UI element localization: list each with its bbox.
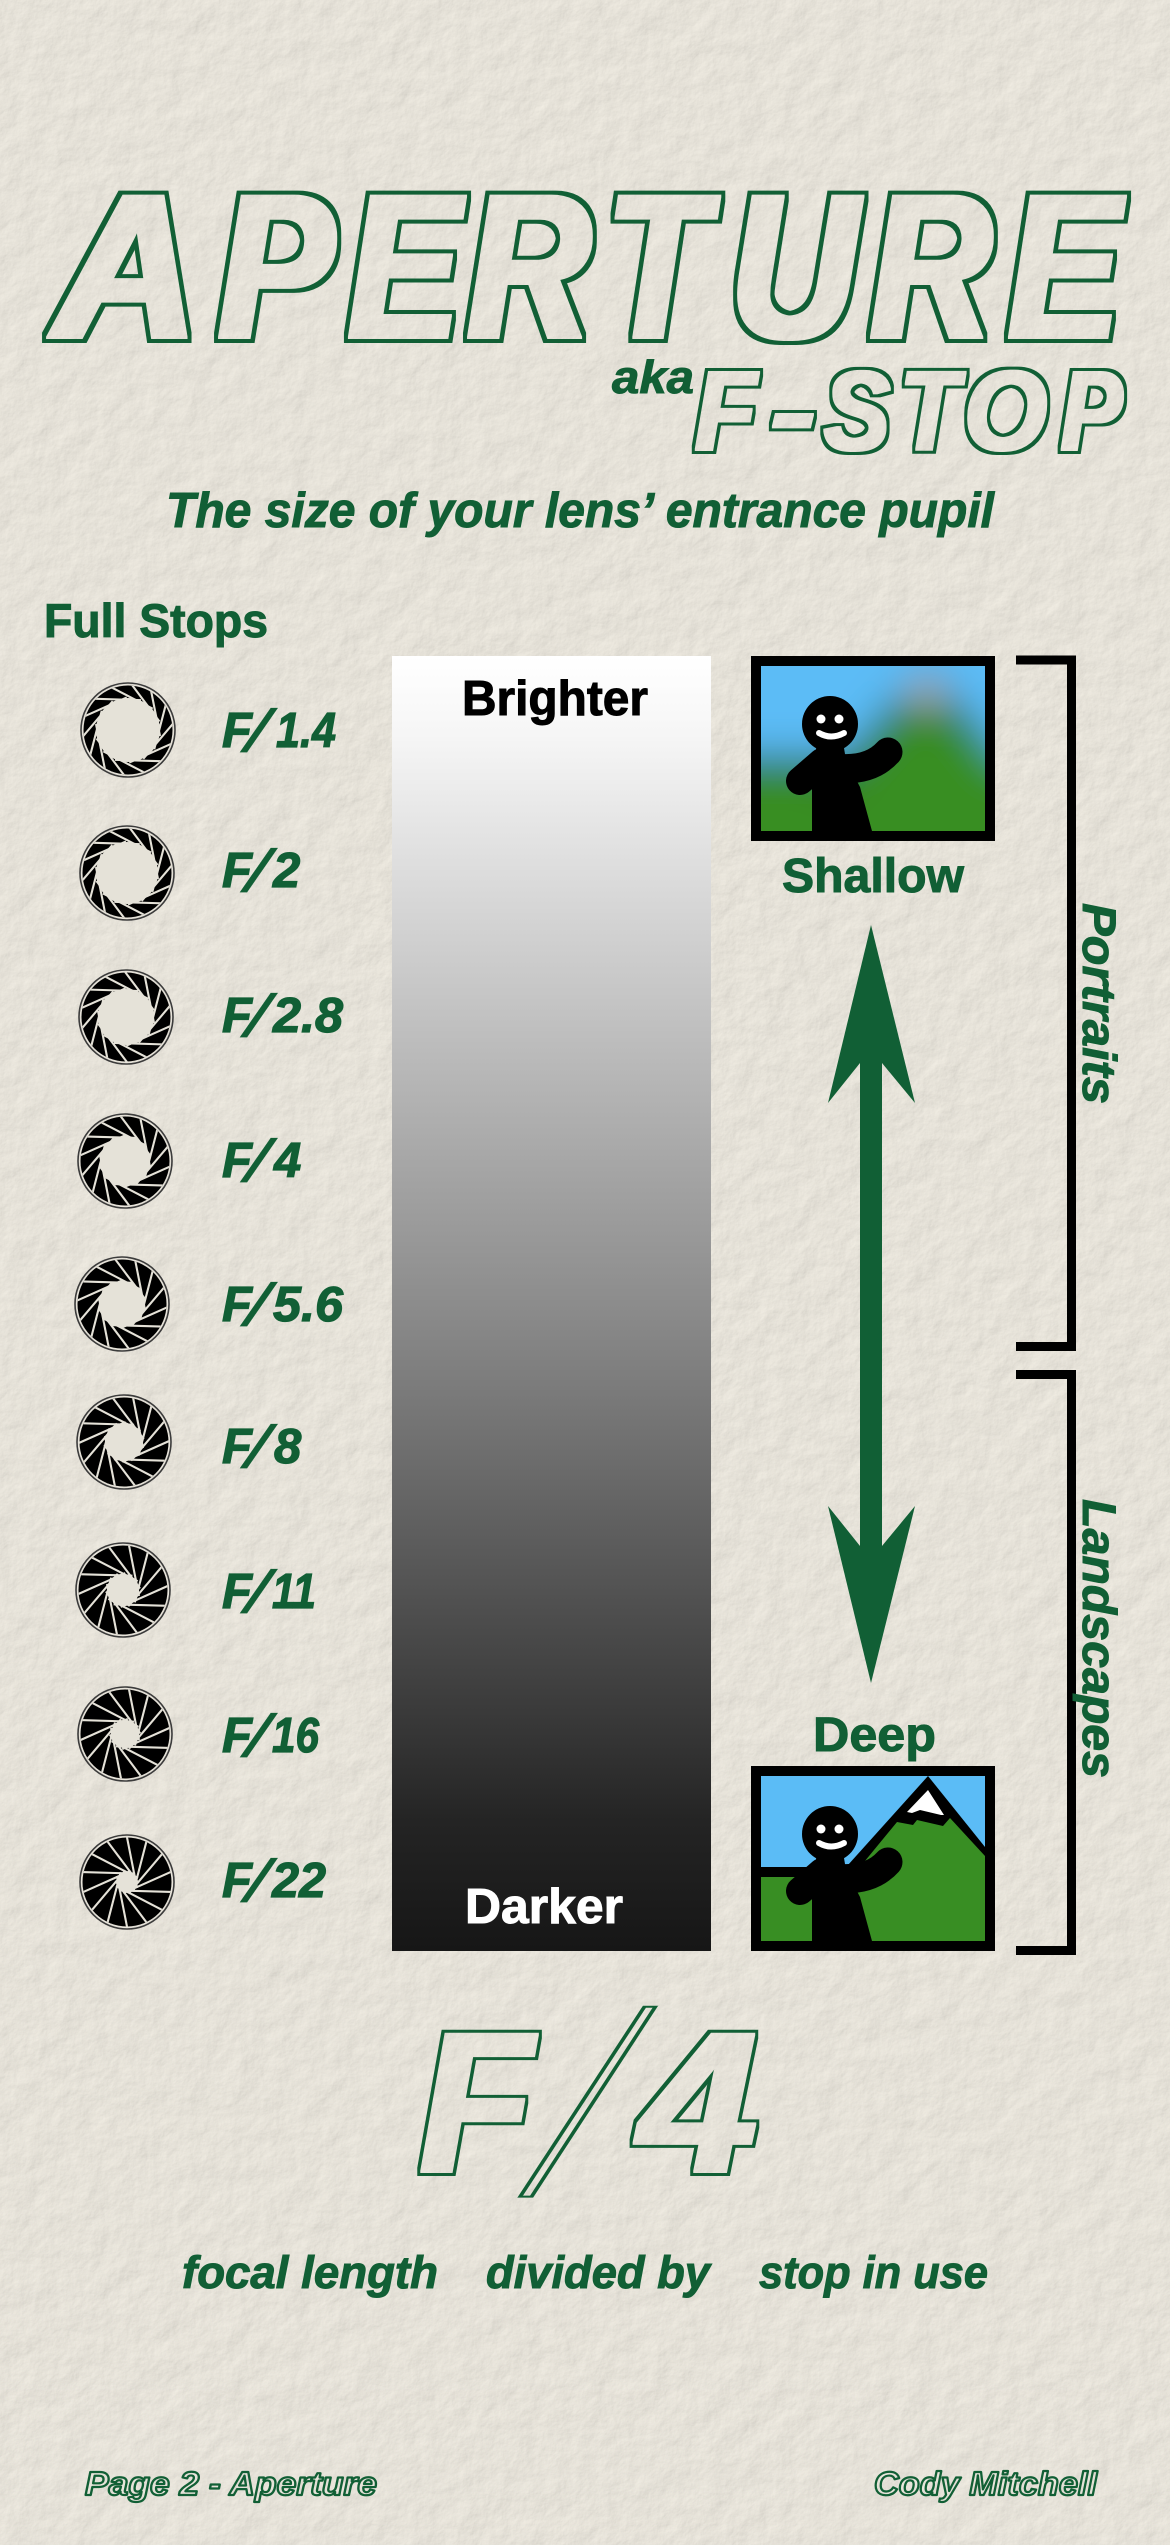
label: Shallow: Shallow (782, 850, 965, 903)
label: F/4: 4 (273, 1134, 301, 1188)
formula: F/4: / (508, 1958, 670, 2253)
label: F/16: F (222, 1709, 253, 1763)
label: F/1.4: / (239, 698, 278, 765)
label: F/2.8: 2.8 (272, 989, 344, 1043)
label: Deep: Deep (813, 1709, 936, 1762)
label: F/16: 16 (272, 1709, 320, 1763)
aperture stops list (49, 653, 344, 1952)
formula caption: stop in use: stop in use (759, 2247, 988, 2298)
label: F/11: / (239, 1559, 278, 1626)
icon: iris F/4 (51, 1087, 199, 1235)
title: APERTURE: E (1009, 151, 1124, 382)
label: F/5.6: / (239, 1272, 278, 1339)
formula: F/4: 4 (635, 1990, 757, 2215)
title: APERTURE: U (731, 151, 861, 382)
icon: iris F/1.4 (53, 653, 203, 807)
brightness gradient bar (392, 656, 711, 1951)
label: F/11: F (222, 1565, 253, 1619)
label: F/22: / (239, 1848, 278, 1915)
bracket: portraits (1016, 660, 1072, 1346)
label: F/11: 11 (272, 1565, 316, 1619)
footer: page label: Page 2 - Aperture (85, 2465, 377, 2502)
heading: Full Stops: Full Stops (44, 594, 268, 647)
label: F/22: F (222, 1854, 253, 1908)
label: Landscapes: Landscapes (1073, 1499, 1126, 1778)
subtitle: F-STOP: P (1061, 348, 1123, 474)
label: F/2: 2 (272, 844, 300, 898)
picture: deep depth of field (751, 1766, 995, 1951)
label: F/1.4: F (222, 704, 253, 758)
icon: iris F/16 (54, 1664, 196, 1804)
title: APERTURE: A (49, 151, 198, 382)
picture: shallow depth of field (751, 656, 995, 841)
label: F/8: / (239, 1414, 278, 1481)
label: F/1.4: 1.4 (276, 704, 336, 758)
label: F/5.6: F (222, 1278, 253, 1332)
label: Portraits: Portraits (1073, 903, 1126, 1104)
arrow: depth of field double-headed (828, 925, 915, 1683)
label: F/8: F (222, 1420, 253, 1474)
subtitle: F-STOP: - (770, 348, 816, 474)
label: F/22: 22 (271, 1854, 326, 1908)
footer: author: Cody Mitchell (874, 2465, 1098, 2502)
label: F/16: / (239, 1703, 278, 1770)
icon: iris F/5.6 (49, 1231, 195, 1377)
subtitle: F-STOP: F (695, 348, 759, 474)
subtitle: F-STOP: O (964, 348, 1047, 474)
label: F/8: 8 (274, 1420, 302, 1474)
icon: iris F/22 (57, 1812, 197, 1952)
label: F/4: F (222, 1134, 253, 1188)
label: Darker: Darker (465, 1880, 623, 1934)
label: F/2.8: / (239, 983, 278, 1050)
bracket: landscapes (1016, 1374, 1072, 1950)
icon: iris F/11 (51, 1520, 195, 1660)
label: F/5.6: 5.6 (273, 1278, 344, 1332)
title: APERTURE: R (871, 151, 991, 382)
subtitle: definition: The size of your lens’ entrance pupil (166, 484, 995, 538)
icon: iris F/2.8 (52, 942, 200, 1092)
label: F/2.8: F (222, 989, 253, 1043)
formula: F/4: F (420, 1990, 537, 2215)
title: APERTURE: P (219, 151, 334, 382)
formula: F/4 (420, 1958, 757, 2253)
label: F/4: / (239, 1128, 278, 1195)
title: APERTURE: E (349, 151, 464, 382)
subtitle: F-STOP: S (824, 348, 890, 474)
label: Brighter: Brighter (462, 672, 648, 726)
label: F/2: / (239, 838, 278, 905)
title: APERTURE: R (468, 151, 590, 382)
subtitle: F-STOP: T (900, 348, 965, 474)
icon: iris F/8 (52, 1371, 196, 1513)
icon: iris F/2 (52, 796, 202, 950)
formula caption: focal length: focal length (182, 2247, 438, 2298)
formula caption: divided by: divided by (486, 2247, 712, 2298)
aka label: aka (612, 351, 694, 403)
label: F/2: F (222, 844, 253, 898)
title: APERTURE: T (607, 151, 717, 382)
